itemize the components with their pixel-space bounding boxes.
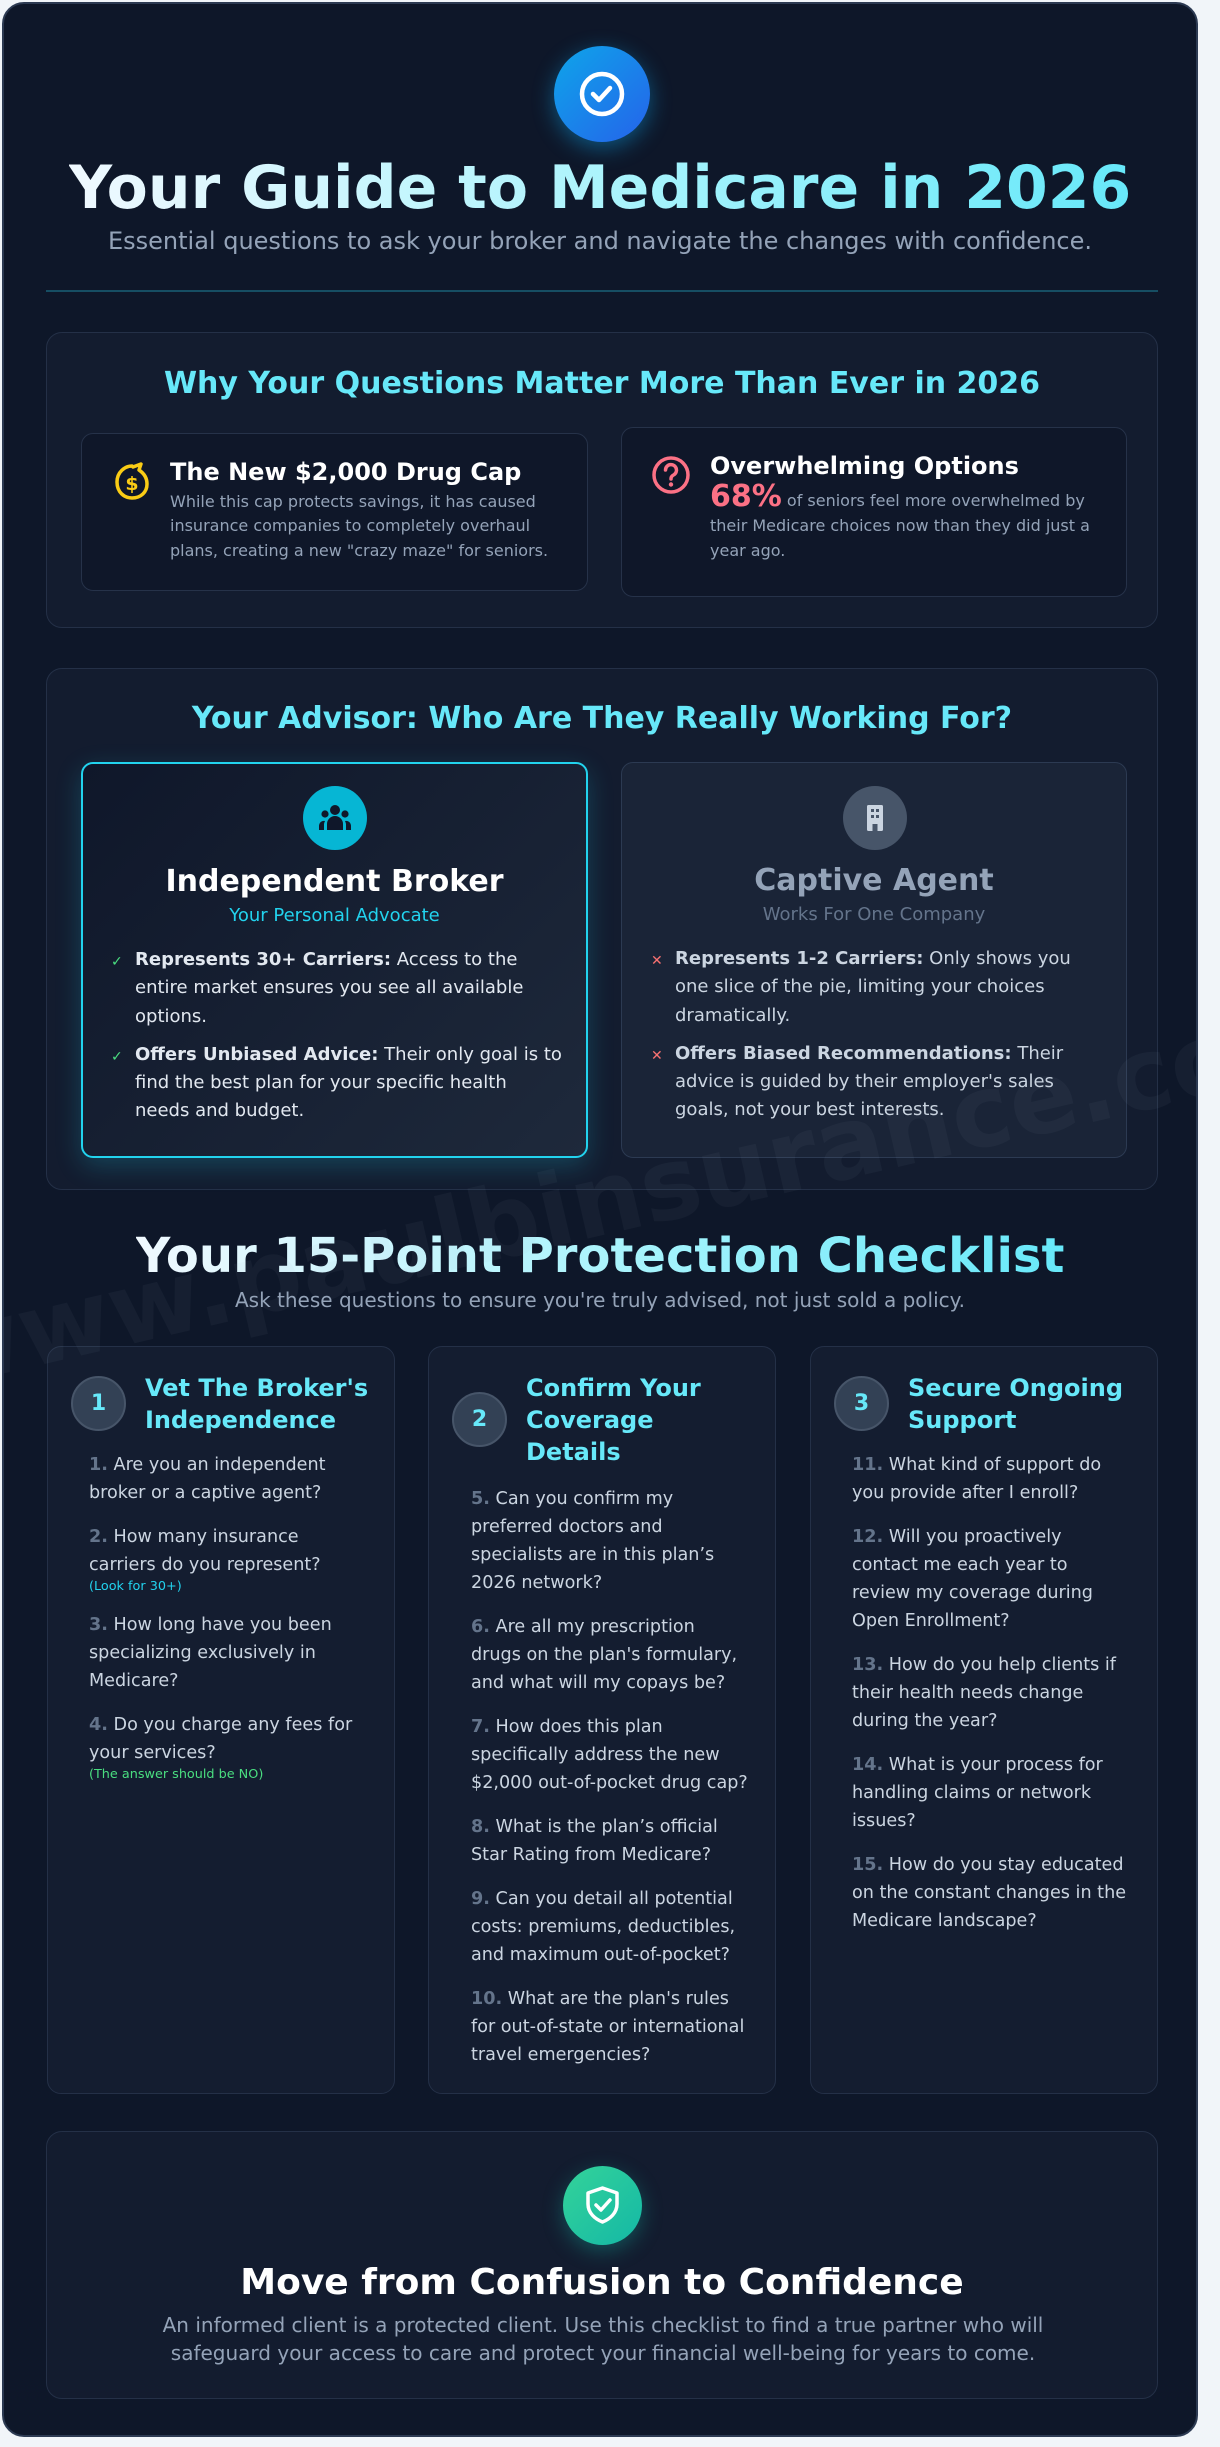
icon: header check badge <box>554 46 650 142</box>
questions 5-10: 5. Can you confirm my <box>471 1489 673 1509</box>
icon: dollar <box>115 462 149 500</box>
card: independent broker <box>81 762 588 1158</box>
questions 11-15: 15. How do you stay educated <box>852 1855 1124 1875</box>
questions 11-15: issues? <box>852 1811 916 1831</box>
agent bullets <box>651 948 1071 1120</box>
questions 11-15 <box>852 1455 1126 1931</box>
heading: why questions matter: Why Your Questions Matter More Than Ever in 2026 <box>164 366 1040 401</box>
questions 5-10: 2026 network? <box>471 1573 602 1593</box>
column title 3: Secure Ongoing Support <box>908 1374 1123 1434</box>
number badge 2 <box>452 1392 507 1447</box>
subtitle: Essential questions to ask your broker and navigate the changes with confidence. <box>108 227 1092 255</box>
column 2: coverage details <box>428 1346 776 2094</box>
text: drug cap: While this cap protects savings, it has caused insurance companies to completely overhaul plans, creating a new "crazy maze" for seniors. <box>170 492 548 560</box>
questions 5-10: specifically address the new <box>471 1745 720 1765</box>
broker subtitle: Your Personal Advocate <box>229 905 440 926</box>
broker bullets: Represents 30+ Carriers: Access to the <box>135 949 517 970</box>
questions 1-4: 3. How long have you been <box>89 1615 332 1635</box>
questions 5-10: specialists are in this plan’s <box>471 1545 714 1565</box>
column 3: ongoing support <box>810 1346 1158 2094</box>
questions 1-4: Medicare? <box>89 1671 179 1691</box>
panel: why questions matter <box>46 332 1158 628</box>
questions 5-10: travel emergencies? <box>471 2045 650 2065</box>
questions 1-4: specializing exclusively in <box>89 1643 316 1663</box>
card: independent broker: ✓ <box>111 1049 123 1065</box>
number badge 3: 3 <box>854 1391 869 1416</box>
card: captive agent: ✕ <box>651 953 663 969</box>
agent bullets: advice is guided by their employer's sales <box>675 1071 1054 1092</box>
heading: advisor: Your Advisor: Who Are They Really Working For? <box>192 701 1012 736</box>
icon: building <box>843 786 907 850</box>
questions 11-15: review my coverage during <box>852 1583 1093 1603</box>
icon: people <box>303 786 367 850</box>
questions 11-15: during the year? <box>852 1711 997 1731</box>
questions 1-4 <box>89 1455 352 1782</box>
questions 1-4: 1. Are you an independent <box>89 1455 326 1475</box>
questions 11-15: Open Enrollment? <box>852 1611 1010 1631</box>
questions 11-15: handling claims or network <box>852 1783 1091 1803</box>
questions 11-15: 12. Will you proactively <box>852 1527 1062 1547</box>
questions 11-15: 13. How do you help clients if <box>852 1655 1116 1675</box>
number badge 1 <box>71 1376 126 1431</box>
text: overwhelming options: 68% of seniors feel more overwhelmed by their Medicare choices now than they did just a year ago. <box>710 479 1090 560</box>
icon: question <box>652 456 690 494</box>
icon: dollar: $ <box>125 473 139 495</box>
broker bullets: Offers Unbiased Advice: Their only goal is to <box>135 1044 562 1065</box>
text: drug cap <box>170 458 548 560</box>
questions 5-10: 7. How does this plan <box>471 1717 663 1737</box>
number badge 2: 2 <box>472 1407 487 1432</box>
questions 1-4: your services? <box>89 1743 216 1763</box>
questions 5-10 <box>471 1489 748 2065</box>
conclusion text: An informed client is a protected client. Use this checklist to find a true partner who will safeguard your access to care and protect your financial well-being for years to come. <box>163 2313 1043 2365</box>
questions 11-15: 14. What is your process for <box>852 1755 1103 1775</box>
agent subtitle: Works For One Company <box>763 904 985 925</box>
icon: shield <box>563 2166 642 2245</box>
questions 5-10: 10. What are the plan's rules <box>471 1989 729 2009</box>
questions 11-15: on the constant changes in the <box>852 1883 1126 1903</box>
checklist subtitle: Ask these questions to ensure you're truly advised, not just sold a policy. <box>235 1288 965 1312</box>
questions 5-10: Star Rating from Medicare? <box>471 1845 711 1865</box>
questions 5-10: and what will my copays be? <box>471 1673 725 1693</box>
questions 5-10: for out-of-state or international <box>471 2017 744 2037</box>
broker title: Independent Broker <box>165 864 504 899</box>
questions 5-10: and maximum out-of-pocket? <box>471 1945 730 1965</box>
questions 1-4: 2. How many insurance <box>89 1527 299 1547</box>
questions 1-4: (The answer should be NO) <box>89 1767 263 1782</box>
column title 1: Vet The Broker's Independence <box>145 1374 368 1434</box>
column title 2: Confirm Your Coverage Details <box>526 1374 701 1466</box>
checklist heading: Your 15-Point Protection Checklist <box>136 1228 1064 1284</box>
broker bullets: options. <box>135 1006 207 1027</box>
agent bullets: one slice of the pie, limiting your choices <box>675 976 1045 997</box>
questions 5-10: preferred doctors and <box>471 1517 663 1537</box>
number badge 1: 1 <box>91 1391 106 1416</box>
questions 1-4: (Look for 30+) <box>89 1579 182 1594</box>
text: drug cap: The New $2,000 Drug Cap <box>170 458 521 486</box>
card: overwhelming options <box>621 427 1127 597</box>
panel: conclusion <box>46 2131 1158 2399</box>
card: drug cap <box>81 433 588 591</box>
conclusion title: Move from Confusion to Confidence <box>240 2262 964 2303</box>
number badge 3 <box>834 1376 889 1431</box>
column 1: broker independence <box>47 1346 395 2094</box>
questions 1-4: broker or a captive agent? <box>89 1483 321 1503</box>
title: Your Guide to Medicare in 2026 <box>69 153 1131 223</box>
card: captive agent: ✕ <box>651 1048 663 1064</box>
broker bullets: find the best plan for your specific health <box>135 1072 507 1093</box>
questions 5-10: $2,000 out-of-pocket drug cap? <box>471 1773 748 1793</box>
agent bullets: Offers Biased Recommendations: Their <box>675 1043 1063 1064</box>
questions 1-4: 4. Do you charge any fees for <box>89 1715 352 1735</box>
broker bullets <box>111 949 562 1121</box>
questions 5-10: 9. Can you detail all potential <box>471 1889 733 1909</box>
agent title: Captive Agent <box>754 863 994 898</box>
card: independent broker: ✓ <box>111 954 123 970</box>
text: overwhelming options: Overwhelming Options <box>710 452 1019 480</box>
card: captive agent <box>621 762 1127 1158</box>
questions 11-15: Medicare landscape? <box>852 1911 1037 1931</box>
agent bullets: Represents 1-2 Carriers: Only shows you <box>675 948 1071 969</box>
broker bullets: entire market ensures you see all available <box>135 977 523 998</box>
questions 11-15: you provide after I enroll? <box>852 1483 1078 1503</box>
questions 11-15: their health needs change <box>852 1683 1083 1703</box>
questions 11-15: contact me each year to <box>852 1555 1068 1575</box>
broker bullets: needs and budget. <box>135 1100 304 1121</box>
questions 5-10: drugs on the plan's formulary, <box>471 1645 737 1665</box>
questions 11-15: 11. What kind of support do <box>852 1455 1101 1475</box>
questions 5-10: 6. Are all my prescription <box>471 1617 695 1637</box>
panel: advisor comparison <box>46 668 1158 1190</box>
questions 5-10: costs: premiums, deductibles, <box>471 1917 735 1937</box>
agent bullets: dramatically. <box>675 1005 790 1026</box>
agent bullets: goals, not your best interests. <box>675 1099 944 1120</box>
questions 5-10: 8. What is the plan’s official <box>471 1817 718 1837</box>
questions 1-4: carriers do you represent? <box>89 1555 321 1575</box>
